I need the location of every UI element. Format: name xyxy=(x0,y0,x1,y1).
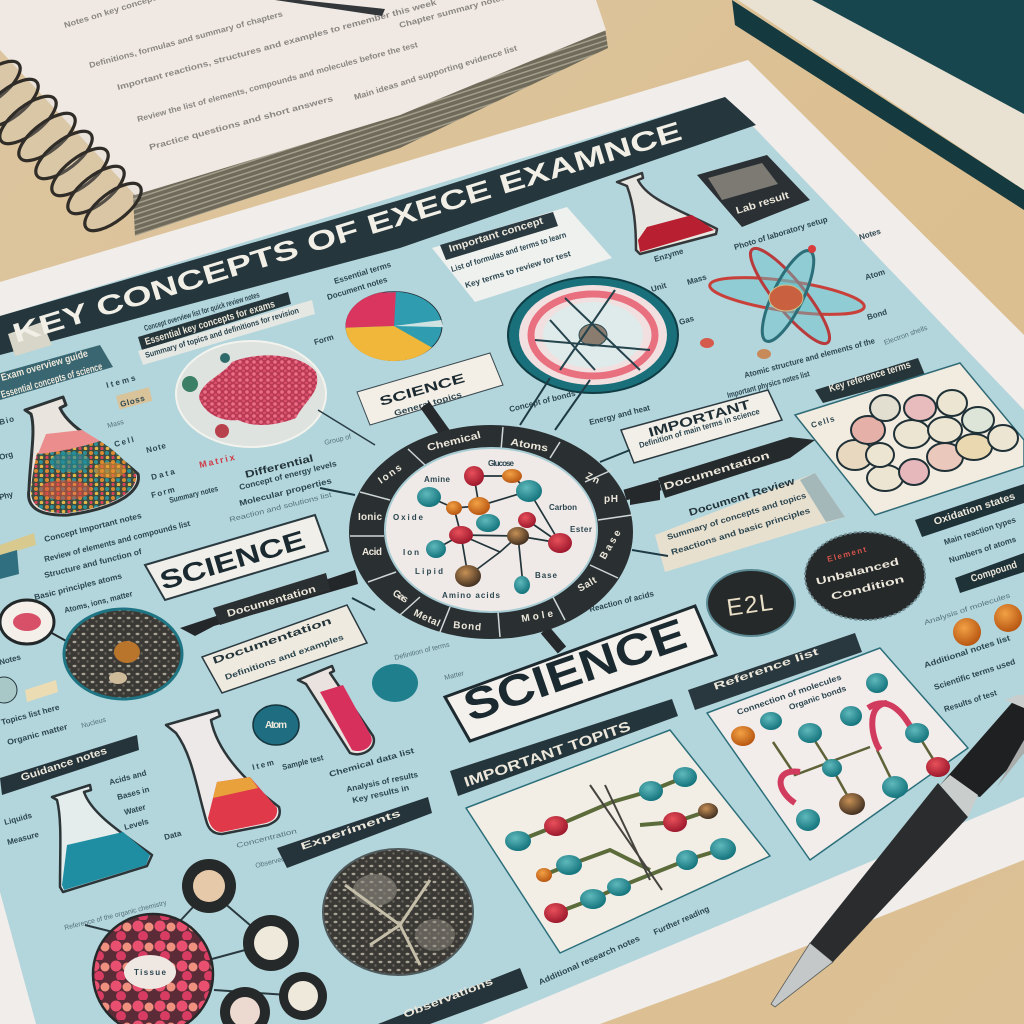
flask notes: Data xyxy=(150,467,176,482)
bottom-left text notes xyxy=(3,768,286,932)
teal flask xyxy=(52,785,152,892)
spiral rings xyxy=(0,53,148,239)
extra text around top sheet: Enzyme xyxy=(653,246,685,264)
round dark badge large: Unbalanced xyxy=(815,557,900,588)
left small notes: Topics list here xyxy=(0,703,61,727)
right column notes: Results of test xyxy=(943,688,998,714)
right column notes: Analysis of molecules xyxy=(923,592,1012,627)
top science label xyxy=(357,353,503,425)
right column notes: Additional notes list xyxy=(923,633,1012,670)
round dark badge small xyxy=(707,570,795,636)
network molecule card: Connection of molecules xyxy=(736,672,843,717)
text lines beneath atom: Key reference terms xyxy=(828,359,913,395)
shaded summary card: Reactions and basic principles xyxy=(670,506,812,557)
molecule labels: Oxide xyxy=(393,513,424,522)
extra text around top sheet: Matter xyxy=(444,670,465,682)
right dark connector xyxy=(630,437,815,505)
small science label: SCIENCE xyxy=(156,524,309,596)
ring segment labels: Bond xyxy=(453,620,482,633)
ring segment labels: Mole xyxy=(521,608,554,625)
definition card left: Documentation xyxy=(211,616,333,667)
molecule labels: Ion xyxy=(403,548,419,557)
flask notes: Items xyxy=(105,373,137,390)
shaded summary card: Summary of concepts and topics xyxy=(666,491,808,542)
text lines beneath atom xyxy=(726,336,925,403)
notebook handwriting: Definitions, formulas and summary of chapters xyxy=(88,9,284,70)
molecule labels: Amino acids xyxy=(442,591,501,600)
text block below cluster: Reaction and solutions list xyxy=(229,492,332,524)
upper left heading bars: Essential concepts of science xyxy=(0,361,104,401)
ring segment labels: Chemical xyxy=(426,430,482,454)
network molecule card: Organic bonds xyxy=(788,684,848,712)
large flask with colourful contents xyxy=(25,397,138,515)
test tube xyxy=(298,666,374,754)
caption by seals: Analysis of results xyxy=(346,770,419,794)
network molecule card xyxy=(707,648,968,860)
caption by seals: Item xyxy=(251,758,275,772)
cell network card xyxy=(795,363,1024,515)
extra text around top sheet: Form xyxy=(313,332,335,347)
card footnote text: Additional research notes xyxy=(537,934,642,987)
right dark connector: Documentation xyxy=(663,450,771,493)
ring segment labels xyxy=(358,430,624,633)
text block below cluster: Differential xyxy=(244,453,315,481)
extra text around top sheet: Reaction of acids xyxy=(588,589,655,614)
left edge notes xyxy=(0,414,36,579)
dark pill connector left xyxy=(180,570,358,636)
round dark badge small: E2L xyxy=(725,589,774,622)
ring segment labels: Ions xyxy=(376,462,404,486)
extra text around top sheet: Gas xyxy=(678,314,696,327)
extra text around top sheet: Energy and heat xyxy=(588,403,651,427)
flask notes: Gloss xyxy=(119,394,146,409)
text block under flask xyxy=(33,484,219,615)
caption by seals: Sample test xyxy=(281,753,325,772)
extra text around top sheet: Mass xyxy=(686,272,708,287)
pie chart xyxy=(338,286,450,367)
flask notes xyxy=(105,373,176,500)
molecule labels: Ester xyxy=(570,525,592,534)
bottom heading bar xyxy=(378,968,528,1024)
dark photo card xyxy=(697,155,810,227)
extra text around top sheet: Notes xyxy=(858,227,882,242)
blue round seals xyxy=(253,664,418,745)
molecule cluster circle xyxy=(176,341,375,447)
important topics bar xyxy=(450,699,678,796)
top science label: SCIENCE xyxy=(378,370,467,409)
right column notes xyxy=(915,484,1024,714)
dark specimen circle xyxy=(323,849,473,975)
card footnote text xyxy=(537,904,711,987)
caption by seals xyxy=(236,746,419,850)
extra text around top sheet xyxy=(313,215,929,682)
ring segment labels: Acid xyxy=(362,547,382,558)
note card top: Important concept xyxy=(448,215,545,255)
linked node diagram xyxy=(85,859,327,1024)
ring diagram xyxy=(508,277,678,393)
important topics bar: IMPORTANT TOPITS xyxy=(462,718,632,790)
extra text around top sheet: Photo of laboratory setup xyxy=(733,215,829,252)
closed book xyxy=(732,0,1024,210)
important callout xyxy=(621,390,782,463)
shaded summary card xyxy=(655,473,845,572)
ring segment labels: Zn xyxy=(584,471,601,487)
molecule atoms xyxy=(417,466,572,594)
top science label: General topics xyxy=(393,390,464,418)
extra text around top sheet: Bond xyxy=(866,307,888,322)
ring segment labels: Salt xyxy=(576,575,599,595)
text block below cluster: Matrix xyxy=(198,452,236,470)
ring segment labels: Metal xyxy=(412,608,442,630)
caption by seals: Key results in xyxy=(351,783,410,805)
bottom-left text notes: Liquids xyxy=(3,811,34,827)
round dark badge large xyxy=(805,532,925,620)
atom model xyxy=(700,240,866,359)
bottom-left text notes: Reference of the organic chemistry xyxy=(64,900,168,932)
important callout: IMPORTANT xyxy=(647,397,752,440)
important callout: Definition of main terms in science xyxy=(638,407,761,450)
bottom-left text notes: Data xyxy=(163,829,183,842)
text block under flask: Concept Important notes xyxy=(43,511,143,544)
bottom-left text notes: Measure xyxy=(6,830,40,847)
science main label xyxy=(445,606,716,741)
extra text around top sheet: Definition of terms xyxy=(394,641,451,662)
ballpoint pen xyxy=(771,695,1024,1007)
caption by seals: Chemical data list xyxy=(328,746,416,779)
top heading strip with caption: Summary of topics and definitions for revision xyxy=(144,306,300,360)
text block under flask: Summary notes xyxy=(168,484,219,505)
text block under flask: Basic principles atoms xyxy=(33,571,123,602)
card footnote text: Further reading xyxy=(652,904,711,937)
dark pill connector left: Documentation xyxy=(226,584,317,620)
extra text around top sheet: Electron shells xyxy=(883,325,929,347)
text block under flask: Atoms, ions, matter xyxy=(63,589,133,615)
text block under flask: Structure and function of xyxy=(43,547,143,580)
flask notes: Mass xyxy=(107,419,125,430)
right column notes: Scientific terms used xyxy=(933,657,1017,692)
note card top xyxy=(432,207,612,302)
extra text around top sheet: Concept of bonds xyxy=(508,389,577,414)
lower heading bar: Experiments xyxy=(299,808,403,853)
caption by seals: Concentration xyxy=(236,828,298,850)
flask notes: Form xyxy=(150,485,176,500)
flask top with red liquid xyxy=(617,173,717,254)
left small notes: Nucleus xyxy=(81,716,107,730)
extra text around top sheet: Unit xyxy=(650,281,668,294)
pen on notebook xyxy=(275,0,385,16)
text block under flask: Review of elements and compounds list xyxy=(43,519,191,564)
left heading bar xyxy=(0,735,139,795)
left heading bar: Guidance notes xyxy=(20,745,109,784)
right column notes: Compound xyxy=(970,560,1019,585)
molecule labels xyxy=(393,459,592,600)
left small notes xyxy=(0,652,107,747)
molecule labels: Lipid xyxy=(415,567,443,576)
blue round seals: Atom xyxy=(265,720,287,731)
small science label xyxy=(145,515,328,600)
extra text around top sheet: Document notes xyxy=(326,275,389,302)
text block below cluster xyxy=(198,452,338,524)
chain molecule card xyxy=(466,730,770,953)
tall flask with layered liquid xyxy=(166,710,280,834)
title banner xyxy=(0,97,756,356)
ring segment labels: Gas xyxy=(390,588,410,606)
top heading strip with caption: Essential key concepts for exams xyxy=(144,299,277,348)
extra text around top sheet: Atom xyxy=(864,267,886,282)
flask notes: Note xyxy=(145,441,167,455)
definition card left xyxy=(202,605,367,693)
extra text around top sheet: Group of xyxy=(324,434,352,447)
extra text around top sheet: Essential terms xyxy=(333,260,393,286)
ring segment labels: Ionic xyxy=(358,512,382,523)
upper left heading bars: Exam overview guide xyxy=(0,348,90,384)
notebook handwriting: Main ideas and supporting evidence list xyxy=(353,43,519,102)
definition card left: Definitions and examples xyxy=(224,632,346,682)
central ring diagram xyxy=(320,378,668,650)
bottom-left text notes: Acids and xyxy=(108,768,148,787)
bottom-left text notes: Bases in xyxy=(116,785,150,802)
text block below cluster: Concept of energy levels xyxy=(238,459,338,492)
bottom-left text notes: Water xyxy=(123,803,147,817)
molecule labels: Carbon xyxy=(549,503,577,512)
right column notes: Numbers of atoms xyxy=(948,535,1018,565)
bottom-left text notes: Observed xyxy=(255,856,286,870)
molecule labels: Glucose xyxy=(488,459,515,468)
ring segment labels: Atoms xyxy=(509,437,549,455)
linked node diagram: Tissue xyxy=(134,968,167,977)
ring segment labels: Base xyxy=(598,528,624,562)
top heading strip with caption: Concept overview list for quick review notes xyxy=(143,290,261,333)
shaded summary card: Document Review xyxy=(688,476,796,519)
round dark badge large: Element xyxy=(826,545,867,564)
bottom-left text notes: Levels xyxy=(123,817,150,832)
molecule labels: Base xyxy=(535,571,558,580)
flask notes: Cell xyxy=(113,435,135,449)
heading bar over right card: Reference list xyxy=(712,646,821,693)
spiral notebook xyxy=(0,0,608,239)
dark photo card: Lab result xyxy=(735,190,791,217)
heading bar over right card xyxy=(688,633,862,710)
round dark badge large: Condition xyxy=(830,574,905,603)
lower heading bar xyxy=(277,797,432,868)
microscopy circle xyxy=(64,609,182,699)
molecule labels: Amine xyxy=(424,475,451,484)
molecule bonds xyxy=(429,476,560,585)
pink cell circle xyxy=(0,600,68,644)
notebook handwriting: Practice questions and short answers xyxy=(148,94,335,152)
text lines beneath atom: Important physics notes list xyxy=(726,369,811,400)
left small notes: Organic matter xyxy=(6,722,68,747)
right column notes: Main reaction types xyxy=(943,515,1017,547)
notebook handwriting: Important reactions, structures and examples to remember this week xyxy=(116,0,438,92)
ring segment dividers xyxy=(350,427,632,637)
ring segment labels: pH xyxy=(604,494,618,505)
title banner: KEY CONCEPTS OF EXECE EXAMNCE xyxy=(9,116,685,349)
cell network card: Cells xyxy=(810,414,836,430)
text block below cluster: Molecular properties xyxy=(238,476,333,508)
right column notes: Oxidation states xyxy=(933,491,1017,528)
science main label: SCIENCE xyxy=(457,610,693,731)
bottom heading bar: Observations xyxy=(402,976,495,1021)
note card top: Key terms to review for test xyxy=(464,249,572,290)
note card top: List of formulas and terms to learn xyxy=(450,230,567,274)
text lines beneath atom: Atomic structure and elements of the xyxy=(743,336,876,380)
notebook handwriting: Review the list of elements, compounds and molecules before the test xyxy=(136,40,419,124)
notebook handwriting xyxy=(63,0,519,152)
